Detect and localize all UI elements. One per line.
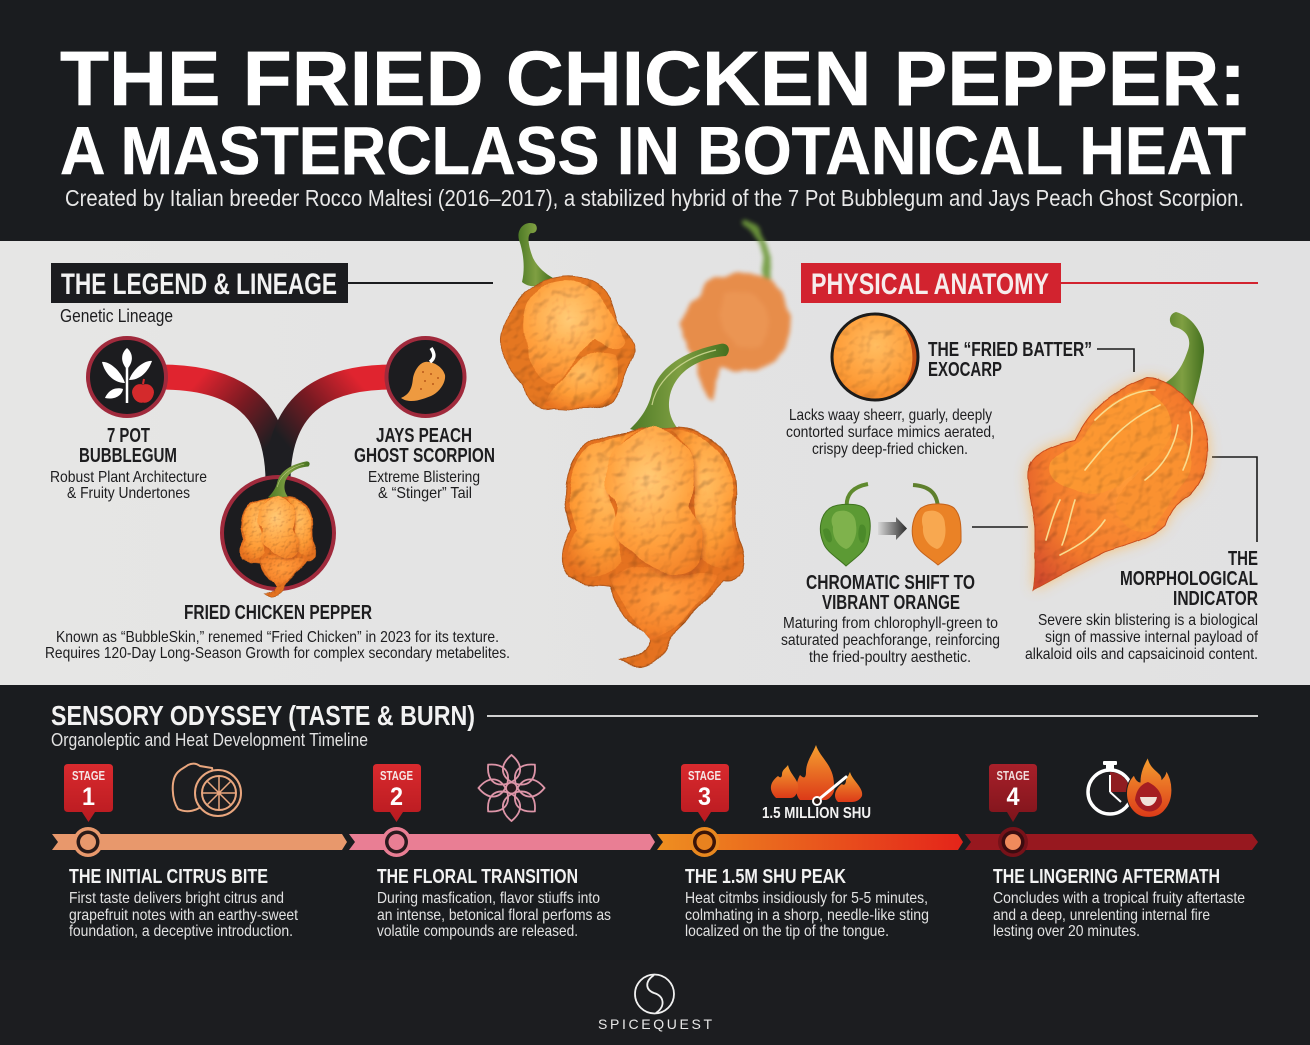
- stage 3 text: localized on the tip of the tongue.: [685, 923, 889, 940]
- label: fried batter exocarp: contorted surface mimics aerated,: [786, 424, 995, 441]
- stage 3 tag: 3: [698, 783, 711, 811]
- label: jays peach ghost scorpion: & “Stinger” Tail: [378, 485, 472, 502]
- stage 2 text: an intense, betonical floral perfoms as: [377, 907, 611, 924]
- icon: flower: [478, 755, 544, 821]
- callout lines: [972, 349, 1257, 542]
- label: morphological indicator: INDICATOR: [1173, 588, 1258, 610]
- label: 7 pot bubblegum: BUBBLEGUM: [79, 445, 177, 467]
- pepper: morphological indicator: [1028, 312, 1208, 590]
- label: chromatic shift: CHROMATIC SHIFT TO: [806, 572, 975, 594]
- stage 2: [373, 755, 611, 940]
- label: fried batter exocarp: Lacks waay sheerr, guarly, deeply: [789, 407, 992, 424]
- stage 2 text: [377, 866, 611, 940]
- label: jays peach ghost scorpion: Extreme Blistering: [368, 469, 480, 486]
- stage 3 text: Heat citmbs insidiously for 5-5 minutes,: [685, 890, 928, 907]
- central pepper illustrations: [501, 223, 790, 666]
- stage 1: [64, 764, 298, 940]
- stage 1 tag: [64, 764, 113, 822]
- stage 4 tag: [989, 764, 1037, 822]
- subheading: timeline: Organoleptic and Heat Development Timeline: [51, 730, 368, 750]
- subheading: genetic lineage: Genetic Lineage: [60, 306, 173, 326]
- stage 1 text: First taste delivers bright citrus and: [69, 890, 284, 907]
- stage 4 text: [993, 866, 1245, 940]
- title: A MASTERCLASS IN BOTANICAL HEAT: [60, 113, 1246, 189]
- stage 2 text: During masfication, flavor stiuffs into: [377, 890, 600, 907]
- stage 3 text: colmhating in a shorp, needle-like sting: [685, 907, 929, 924]
- heading: the legend and lineage: [51, 263, 493, 303]
- stage 3 tag: STAGE: [688, 769, 721, 783]
- label: 7 pot bubblegum: 7 POT: [107, 425, 150, 447]
- heading: physical anatomy: [801, 263, 1258, 303]
- stage 4 text: THE LINGERING AFTERMATH: [993, 866, 1220, 888]
- panel: sensory odyssey: [51, 700, 1258, 940]
- stage 2 text: volatile compounds are released.: [377, 923, 578, 940]
- label: chromatic shift: VIBRANT ORANGE: [822, 592, 960, 614]
- stage 2 tag: 2: [390, 783, 403, 811]
- timeline ribbon: [52, 827, 1258, 857]
- pepper: upper left: [501, 223, 634, 410]
- label: jays peach ghost scorpion: GHOST SCORPION: [354, 445, 495, 467]
- stage 4 text: Concludes with a tropical fruity aftertaste: [993, 890, 1245, 907]
- icon: exocarp swatch: [830, 312, 920, 402]
- label: 7 pot bubblegum: & Fruity Undertones: [67, 485, 190, 502]
- icon: citrus: [173, 764, 241, 816]
- label: chromatic shift: saturated peachforange, reinforcing: [781, 632, 1000, 649]
- label: 7 pot bubblegum: Robust Plant Architecture: [50, 469, 207, 486]
- title: [60, 36, 1246, 189]
- stage 2 tag: STAGE: [380, 769, 413, 783]
- stage 1 text: [69, 866, 298, 940]
- heading: physical anatomy: PHYSICAL ANATOMY: [811, 268, 1049, 301]
- icon: spicequest logo: [635, 974, 674, 1014]
- label: fried chicken pepper: [45, 602, 510, 662]
- label: fried batter exocarp: EXOCARP: [928, 359, 1002, 381]
- icon: ghost scorpion pepper: [386, 338, 464, 416]
- label: morphological indicator: [1025, 548, 1258, 663]
- label: fried batter exocarp: crispy deep-fried chicken.: [812, 441, 968, 458]
- header: [60, 36, 1246, 211]
- stage 2 text: THE FLORAL TRANSITION: [377, 866, 578, 888]
- stage 2 tag: [373, 764, 421, 822]
- label: chromatic shift: [781, 572, 1000, 666]
- label: fried batter exocarp: [786, 339, 1092, 458]
- label: morphological indicator: MORPHOLOGICAL: [1120, 568, 1258, 590]
- stage 1 text: foundation, a deceptive introduction.: [69, 923, 293, 940]
- label: morphological indicator: sign of massive internal payload of: [1045, 629, 1258, 646]
- label: fried chicken pepper: Known as “BubbleSkin,” renemed “Fried Chicken” in 2023 for its texture.: [56, 629, 499, 646]
- panel: legend and lineage: [45, 263, 510, 662]
- brand name: SPICEQUEST: [598, 1016, 712, 1032]
- stage 4 text: lesting over 20 minutes.: [993, 923, 1140, 940]
- icon: stopwatch and flame: [1088, 757, 1172, 817]
- heading: sensory odyssey: SENSORY ODYSSEY (TASTE & BURN): [51, 700, 475, 731]
- stage 3 text: [685, 866, 929, 940]
- icon: flames and gauge: [771, 745, 862, 805]
- stage 4: [989, 757, 1245, 940]
- lineage connector: [160, 377, 392, 482]
- label: 1.5 million shu: 1.5 MILLION SHU: [762, 805, 871, 822]
- label: fried chicken pepper: Requires 120-Day Long-Season Growth for complex secondary metabelites.: [45, 645, 510, 662]
- stage 4 tag: STAGE: [996, 769, 1030, 783]
- stage 3: [681, 745, 929, 940]
- stage 4 tag: 4: [1006, 783, 1020, 811]
- pepper: main hero: [562, 344, 745, 666]
- stage 1 tag: STAGE: [72, 769, 105, 783]
- icon: fried chicken pepper hybrid: [222, 461, 334, 597]
- label: jays peach ghost scorpion: [354, 425, 495, 502]
- pepper: blurred background: [681, 223, 790, 402]
- footer: [0, 960, 1310, 1045]
- label: fried batter exocarp: THE “FRIED BATTER”: [928, 339, 1092, 361]
- panel: physical anatomy: [781, 263, 1258, 666]
- label: 7 pot bubblegum: [50, 425, 207, 502]
- heading: the legend and lineage: THE LEGEND & LINEAGE: [61, 268, 337, 301]
- light panel background: [0, 241, 1310, 685]
- icon: green to orange chromatic shift: [820, 484, 961, 566]
- stage 3 tag: [681, 764, 729, 822]
- icon: 7 pot plant: [88, 338, 166, 416]
- label: morphological indicator: Severe skin blistering is a biological: [1038, 612, 1258, 629]
- label: morphological indicator: alkaloid oils and capsaicinoid content.: [1025, 646, 1258, 663]
- label: chromatic shift: Maturing from chlorophyll-green to: [783, 615, 998, 632]
- label: chromatic shift: the fried-poultry aesthetic.: [809, 649, 971, 666]
- label: jays peach ghost scorpion: JAYS PEACH: [376, 425, 472, 447]
- label: morphological indicator: THE: [1228, 548, 1258, 570]
- label: fried chicken pepper: FRIED CHICKEN PEPPER: [184, 602, 372, 624]
- stage 3 text: THE 1.5M SHU PEAK: [685, 866, 846, 888]
- stage 1 tag: 1: [82, 783, 95, 811]
- stage 1 text: grapefruit notes with an earthy-sweet: [69, 907, 298, 924]
- title: THE FRIED CHICKEN PEPPER:: [60, 36, 1246, 122]
- stage 4 text: and a deep, unrelenting internal fire: [993, 907, 1210, 924]
- stage 1 text: THE INITIAL CITRUS BITE: [69, 866, 268, 888]
